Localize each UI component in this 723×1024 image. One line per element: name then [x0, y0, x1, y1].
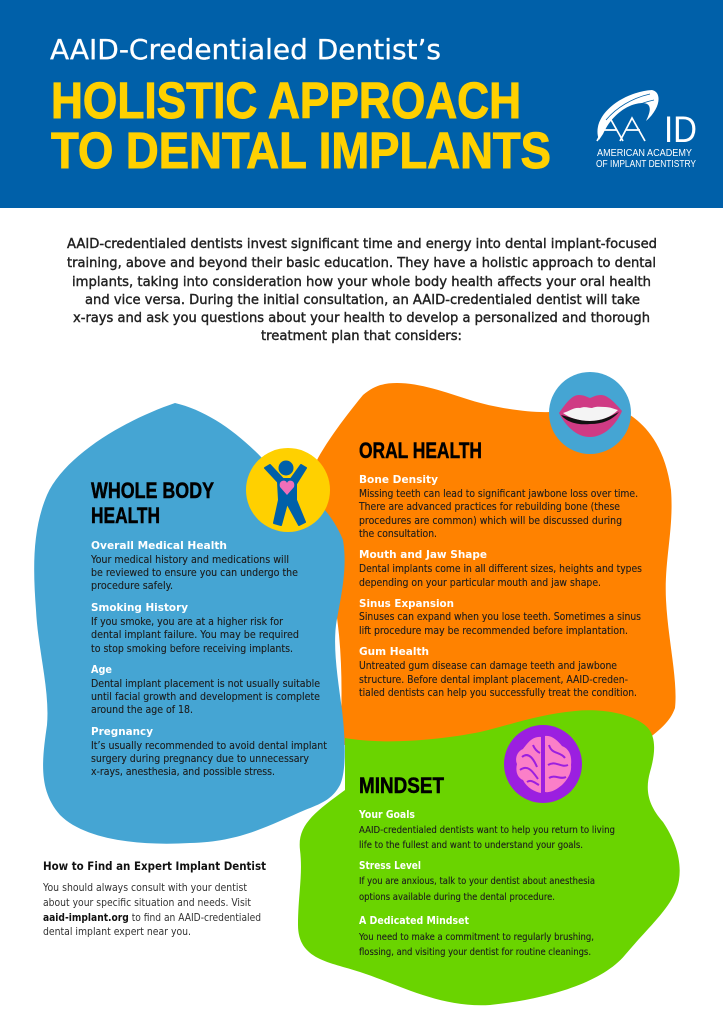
main title	[51, 72, 551, 179]
find an expert text block: about your specific situation and needs. Visit	[43, 897, 251, 909]
topic: pregnancy: Pregnancy	[91, 725, 153, 738]
heading: whole body health: WHOLE BODY	[91, 478, 214, 503]
find an expert heading: How to Find an Expert Implant Dentist	[43, 859, 266, 873]
topic: smoking history	[91, 601, 299, 655]
panel: oral health	[290, 372, 676, 745]
topic: your goals: AAID-credentialed dentists want to help you return to living	[359, 825, 615, 836]
intro paragraph: implants, taking into consideration how your whole body health affects your oral health	[72, 275, 651, 290]
intro paragraph: and vice versa. During the initial consultation, an AAID-credentialed dentist will take	[85, 293, 640, 308]
topic: mouth and jaw shape: Mouth and Jaw Shape	[359, 548, 487, 561]
heading: whole body health: HEALTH	[91, 503, 160, 528]
topic: a dedicated mindset: You need to make a commitment to regularly brushing,	[358, 932, 594, 943]
topic: smoking history: If you smoke, you are at a higher risk for	[91, 616, 284, 628]
topic: age: Dental implant placement is not usually suitable	[91, 678, 320, 690]
topic: stress level: options available during the dental procedure.	[359, 892, 555, 903]
find an expert text block: You should always consult with your dentist	[42, 882, 247, 894]
find an expert text block	[42, 859, 266, 938]
AAID logo	[596, 90, 697, 170]
main title: HOLISTIC APPROACH	[51, 72, 521, 129]
topic: smoking history: Smoking History	[91, 601, 188, 614]
topic: mouth and jaw shape: depending on your particular mouth and jaw shape.	[359, 577, 601, 589]
topic: smoking history: dental implant failure. You may be required	[91, 629, 299, 641]
topic: bone density: There are advanced practices for rebuilding bone (these	[358, 501, 620, 513]
topic: age: around the age of 18.	[91, 704, 193, 716]
find an expert text block: dental implant expert near you.	[43, 926, 191, 938]
orange blob	[290, 383, 676, 745]
heading: mindset: MINDSET	[359, 773, 444, 798]
intro paragraph: x-rays and ask you questions about your health to develop a personalized and thorough	[73, 311, 650, 326]
panel: whole body health	[34, 403, 345, 844]
topic: pregnancy: x-rays, anesthesia, and possible stress.	[91, 766, 275, 778]
topic: a dedicated mindset	[358, 915, 594, 958]
topic: age: until facial growth and development is complete	[91, 691, 320, 703]
topic: stress level: Stress Level	[359, 860, 421, 872]
topic: gum health: Untreated gum disease can damage teeth and jawbone	[359, 660, 617, 672]
heading: oral health: ORAL HEALTH	[359, 438, 482, 463]
topic: pregnancy: surgery during pregnancy due to unnecessary	[91, 753, 309, 765]
topic: sinus expansion: lift procedure may be recommended before implantation.	[359, 625, 628, 637]
topic: overall medical health: Your medical history and medications will	[90, 554, 289, 566]
topic: bone density	[358, 473, 638, 540]
topic: age: Age	[91, 663, 112, 676]
topic: a dedicated mindset: flossing, and visiting your dentist for routine cleanings.	[359, 947, 591, 958]
topic: gum health	[359, 645, 637, 699]
topic: bone density: Bone Density	[359, 473, 438, 486]
topic: smoking history: to stop smoking before receiving implants.	[91, 643, 293, 655]
intro paragraph: AAID-credentialed dentists invest significant time and energy into dental implant-focused	[67, 237, 657, 252]
green blob	[298, 710, 680, 1005]
topic: sinus expansion: Sinus Expansion	[359, 597, 454, 610]
topic: overall medical health: be reviewed to ensure you can undergo the	[91, 567, 298, 579]
topic: overall medical health: Overall Medical Health	[91, 539, 227, 552]
topic: overall medical health: procedure safely.	[91, 580, 173, 592]
icon: mouth	[549, 372, 631, 454]
panel: mindset	[298, 710, 680, 1005]
topic: bone density: procedures are common) which will be discussed during	[359, 515, 622, 527]
AAID logo: OF IMPLANT DENTISTRY	[596, 159, 696, 170]
topic: your goals: life to the fullest and want to understand your goals.	[359, 840, 583, 851]
topic: sinus expansion	[359, 597, 641, 637]
intro paragraph: training, above and beyond their basic education. They have a holistic approach to dental	[67, 256, 656, 271]
topic: bone density: the consultation.	[359, 528, 437, 540]
AAID logo: AMERICAN ACADEMY	[597, 148, 692, 159]
blue blob	[34, 403, 345, 844]
topic: mouth and jaw shape	[359, 548, 642, 589]
AAID logo: ID	[664, 109, 697, 150]
topic: stress level: If you are anxious, talk to your dentist about anesthesia	[359, 876, 595, 887]
topic: pregnancy: It’s usually recommended to avoid dental implant	[91, 740, 327, 752]
topic: gum health: tialed dentists can help you successfully treat the condition.	[359, 687, 637, 699]
topic: overall medical health	[90, 539, 298, 592]
topic: pregnancy	[91, 725, 327, 778]
topic: sinus expansion: Sinuses can expand when you lose teeth. Sometimes a sinus	[359, 611, 641, 623]
find an expert text block: aaid-implant.org to find an AAID-credentialed	[43, 912, 261, 924]
intro paragraph: treatment plan that considers:	[261, 329, 462, 344]
main title: TO DENTAL IMPLANTS	[51, 122, 551, 179]
header banner	[0, 0, 723, 208]
topic: your goals	[358, 809, 615, 851]
topic: age	[91, 663, 320, 716]
topic: gum health: structure. Before dental implant placement, AAID-creden-	[359, 674, 628, 686]
icon: person with heart	[246, 448, 330, 532]
topic: mouth and jaw shape: Dental implants come in all different sizes, heights and types	[359, 563, 642, 575]
topic: a dedicated mindset: A Dedicated Mindset	[359, 915, 469, 927]
header subtitle: AAID-Credentialed Dentist’s	[50, 34, 441, 66]
topic: gum health: Gum Health	[359, 645, 429, 658]
icon: brain	[504, 725, 582, 803]
topic: stress level	[359, 860, 595, 903]
topic: bone density: Missing teeth can lead to significant jawbone loss over time.	[359, 488, 638, 500]
topic: your goals: Your Goals	[358, 809, 415, 821]
heading: whole body health	[91, 478, 214, 528]
intro paragraph	[67, 237, 657, 344]
